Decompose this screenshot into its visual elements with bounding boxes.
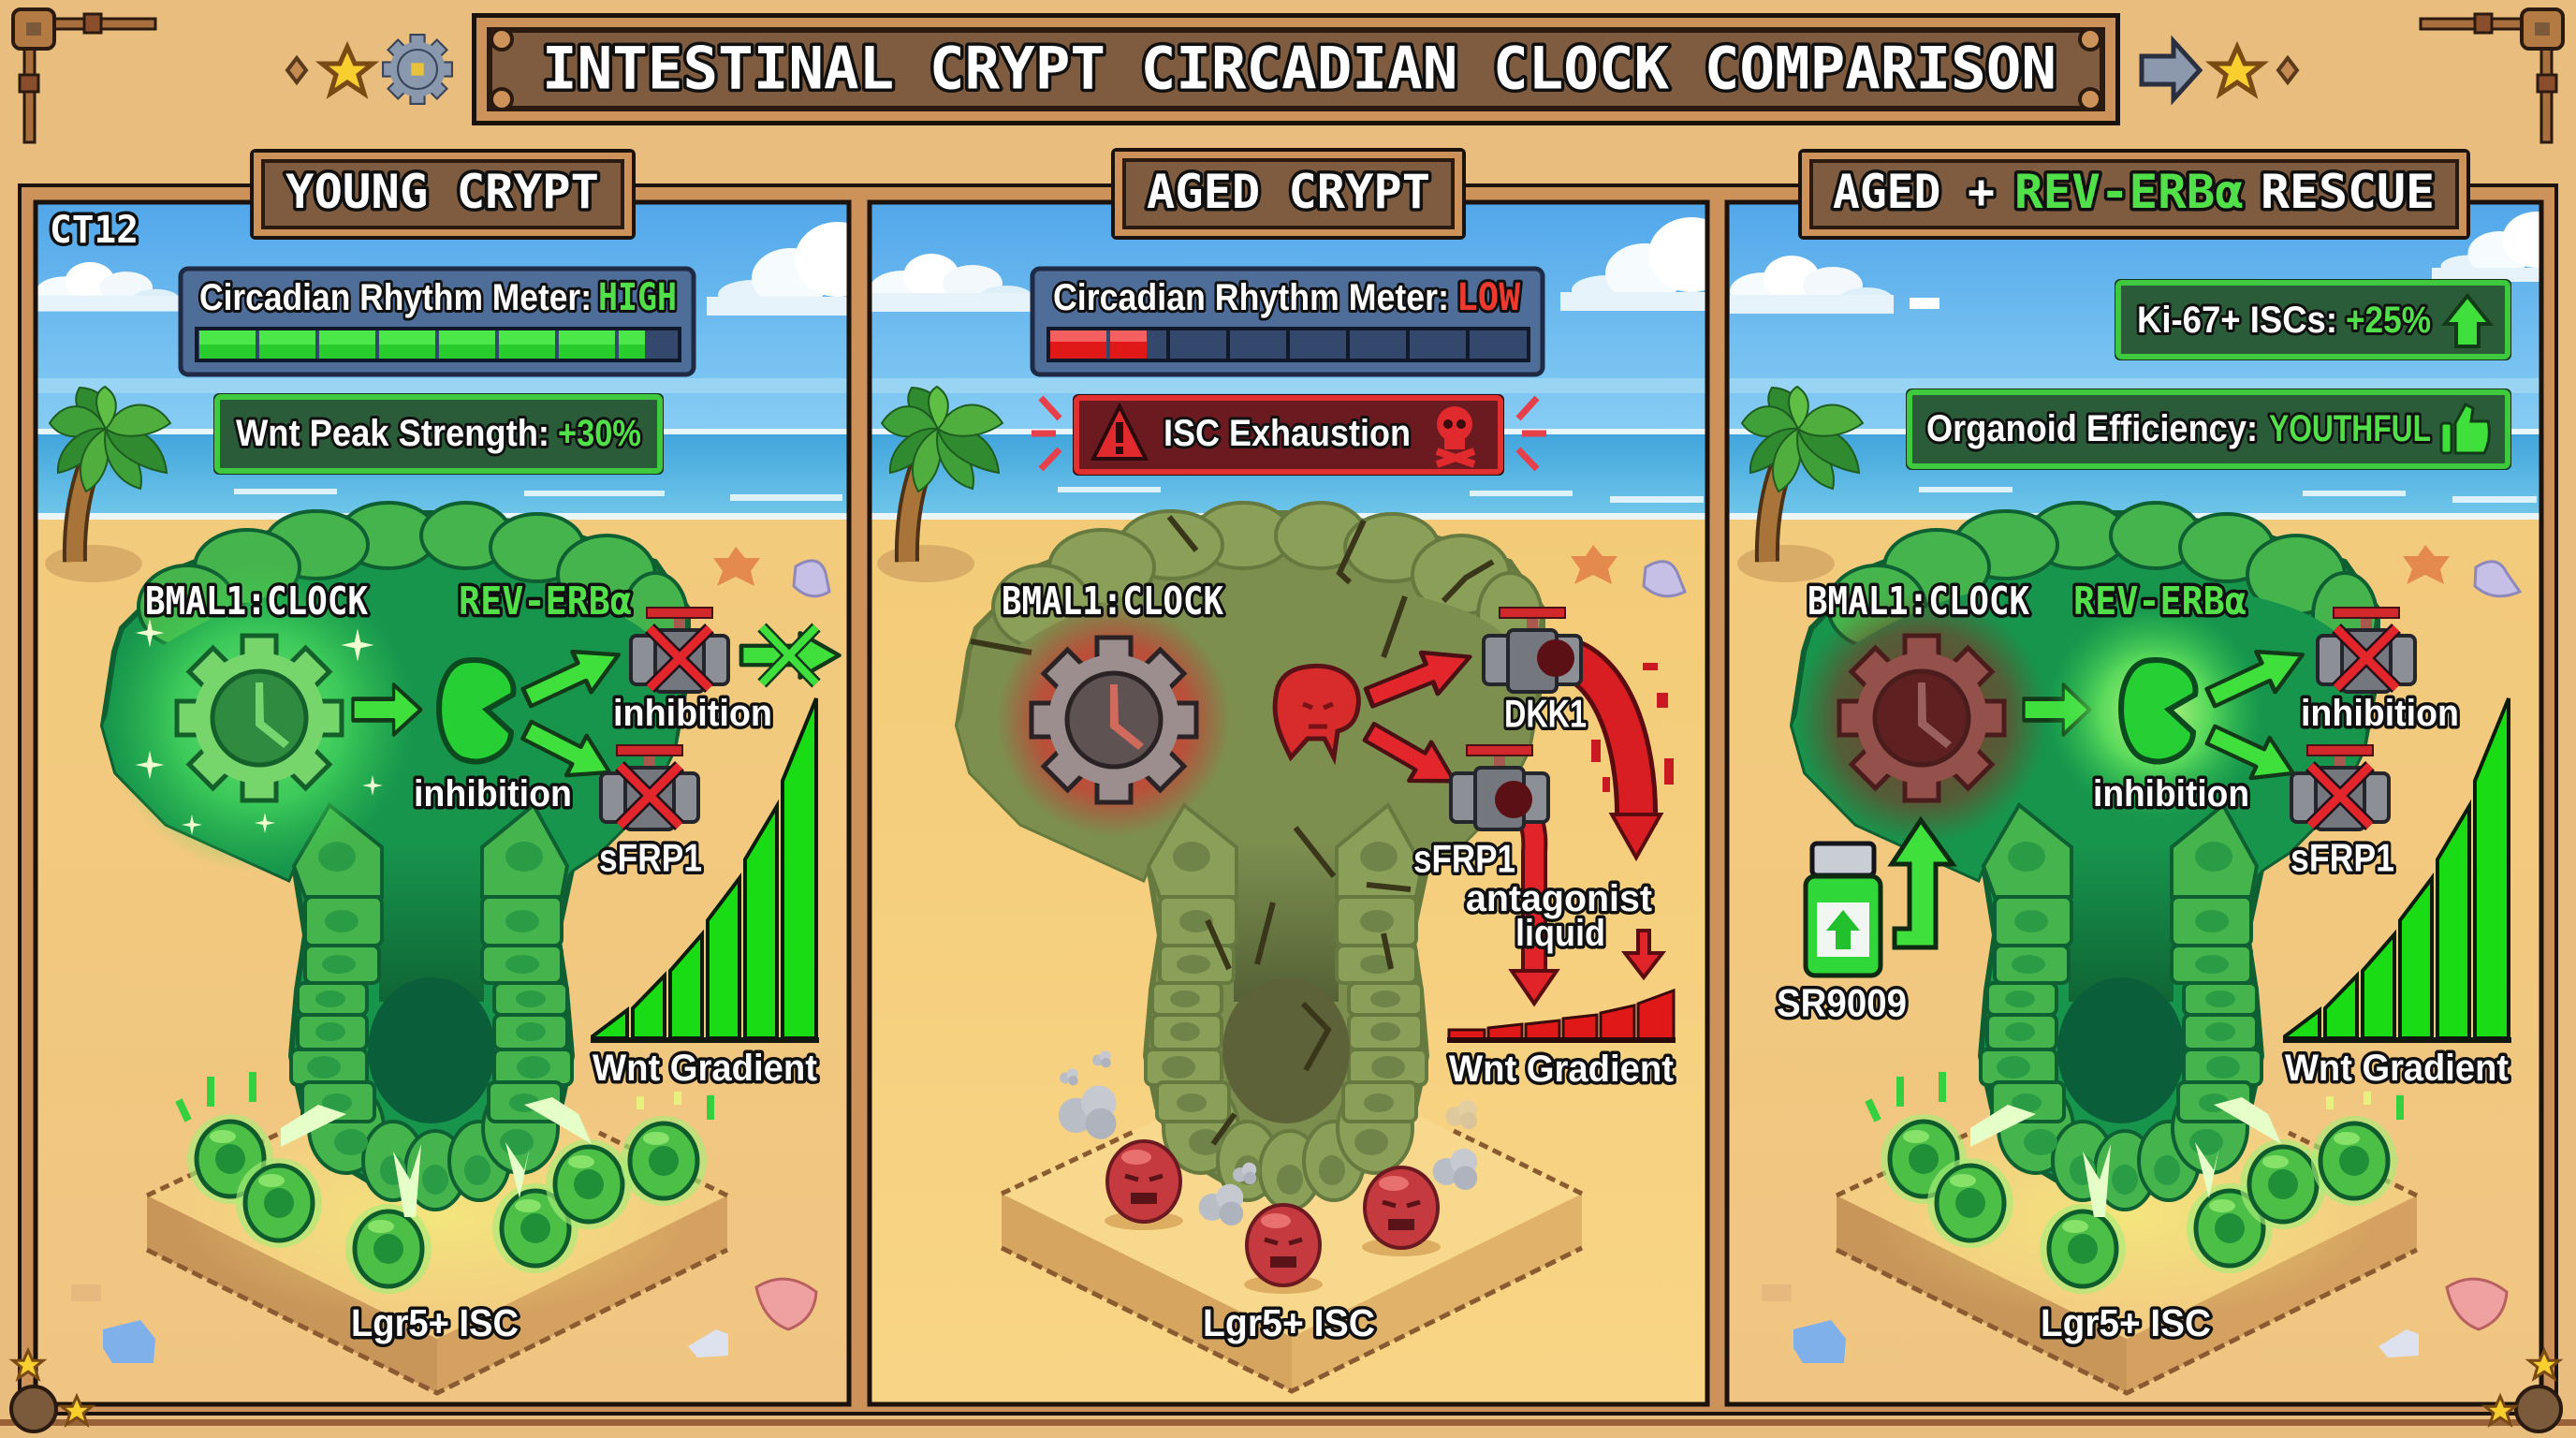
callout: organoid efficiency xyxy=(1906,389,2511,470)
REV-ERB glow xyxy=(2047,604,2262,819)
label: antagonist liquid xyxy=(1466,878,1652,954)
gear clock xyxy=(1032,638,1196,802)
crypt xyxy=(103,503,688,1210)
label: BMAL1:CLOCK: BMAL1:CLOCK xyxy=(1808,579,2029,624)
Wnt gradient chart xyxy=(591,698,819,1043)
corner ornament top-right xyxy=(2421,9,2563,142)
icon: skull and crossbones xyxy=(1437,406,1474,464)
crypt cracks xyxy=(971,517,1493,1144)
withered crypt xyxy=(958,503,1543,1210)
valve: top blocked xyxy=(631,608,728,692)
label: BMAL1:CLOCK: BMAL1:CLOCK xyxy=(1002,579,1223,624)
meter label: Circadian Rhythm Meter: xyxy=(199,277,592,318)
label: inhibition lower: inhibition xyxy=(2093,773,2249,814)
label: antagonist liquid: liquid xyxy=(1515,913,1605,954)
panel title: aged crypt xyxy=(1111,148,1466,240)
beach shells xyxy=(1571,545,1685,596)
beach shells xyxy=(71,547,829,1363)
palm tree xyxy=(45,387,170,582)
label: Lgr5+ ISC: Lgr5+ ISC xyxy=(1203,1301,1375,1344)
arrow: inhibition up xyxy=(518,635,628,718)
arrow: to DKK1 xyxy=(1361,637,1478,718)
icon: up arrow xyxy=(2445,296,2490,346)
label: Wnt Gradient: Wnt Gradient xyxy=(593,1048,817,1089)
platform xyxy=(147,1058,727,1393)
Lgr5 stem cells xyxy=(187,1114,707,1294)
energy streaks xyxy=(175,1072,714,1123)
gear clock xyxy=(177,636,342,800)
valve: sFRP1 blocked xyxy=(2291,745,2389,829)
callout label: Ki-67+ ISCs: xyxy=(2137,300,2337,341)
arrow: inhibition down xyxy=(2202,714,2303,793)
platform glow xyxy=(184,1114,690,1320)
crossed output arrow xyxy=(741,627,839,683)
platform xyxy=(1002,1056,1582,1391)
label: inhibition lower: inhibition xyxy=(414,773,572,814)
label: antagonist liquid: antagonist xyxy=(1466,878,1652,919)
arrow: inhibition up xyxy=(2202,635,2312,718)
label: REV-ERB: REV-ERBα xyxy=(2073,579,2247,624)
header icons left: diamond, star, gear xyxy=(287,35,452,104)
energy streaks xyxy=(1865,1072,2404,1123)
label: Lgr5+ ISC: Lgr5+ ISC xyxy=(2041,1301,2211,1344)
sad red REV-ERB xyxy=(1275,666,1358,757)
title text: aged plus: AGED + xyxy=(1833,165,1995,219)
callout: Wnt peak strength xyxy=(213,393,664,475)
Wnt gradient chart xyxy=(1447,990,1676,1043)
corner ornament bottom-left xyxy=(11,1350,92,1431)
clock glow xyxy=(997,603,1231,837)
Wnt gradient chart xyxy=(2283,698,2511,1043)
callout label: Organoid Efficiency: xyxy=(1926,408,2258,449)
callout value: YOUTHFUL xyxy=(2269,408,2431,449)
SR9009 bottle xyxy=(1806,844,1881,976)
callout value: +25% xyxy=(2346,300,2431,341)
meter value: LOW xyxy=(1456,276,1521,319)
Lgr5 stem cells xyxy=(1881,1114,2397,1294)
beach shells xyxy=(1762,545,2520,1363)
exhausted Lgr5 cells xyxy=(1105,1141,1441,1294)
panel title: rescue xyxy=(1798,149,2470,240)
dust clouds xyxy=(1059,1050,1477,1225)
meter label: Circadian Rhythm Meter: xyxy=(1053,277,1449,318)
title text: AGED CRYPT xyxy=(1147,165,1430,219)
arrow: to sFRP1 xyxy=(1358,712,1465,800)
arrow: clock to REV-ERB xyxy=(2024,684,2089,735)
small red arrow xyxy=(1625,931,1662,977)
clock dim glow xyxy=(1795,592,2048,844)
valve: sFRP1 blocked xyxy=(601,745,698,829)
callout value: +30% xyxy=(558,413,641,454)
title text: REV-ERB: REV-ERBα xyxy=(2014,165,2244,219)
panel: aged + REV-ERB rescue xyxy=(1727,202,2571,1404)
label: REV-ERB: REV-ERBα xyxy=(459,579,632,624)
title banner xyxy=(472,13,2120,125)
palm tree xyxy=(877,387,1003,582)
label: sFRP1: sFRP1 xyxy=(2291,835,2394,880)
corner ornament top-left xyxy=(13,9,155,142)
rhythm meter xyxy=(1032,269,1543,374)
REV-ERB blob xyxy=(2121,660,2195,762)
scene background: beach xyxy=(36,202,881,1404)
clock glow xyxy=(105,564,414,873)
meter bar xyxy=(197,329,680,360)
panel title: young crypt xyxy=(250,149,636,240)
arrow: inhibition down xyxy=(517,711,620,792)
callout label: Wnt Peak Strength: xyxy=(236,413,549,454)
header icons right: arrow, star, diamond xyxy=(2142,41,2297,99)
label: inhibition top: inhibition xyxy=(2301,693,2459,734)
antagonist liquid stream sFRP1 xyxy=(1512,801,1557,1004)
title text: rescue: RESCUE xyxy=(2261,165,2435,219)
panel: young crypt xyxy=(36,202,881,1404)
energy bursts xyxy=(281,1097,592,1217)
label: sFRP1: sFRP1 xyxy=(599,835,702,880)
REV-ERB blob xyxy=(439,660,513,762)
valve: DKK1 xyxy=(1484,608,1581,692)
scene background: beach xyxy=(870,202,1734,1404)
icon: warning triangle xyxy=(1093,406,1146,459)
label: CT12: CT12 xyxy=(50,209,139,252)
meter value: HIGH xyxy=(598,276,677,319)
crypt xyxy=(1793,503,2378,1210)
meter bar xyxy=(1048,329,1529,360)
callout text: ISC Exhaustion xyxy=(1164,413,1411,454)
label: Wnt Gradient: Wnt Gradient xyxy=(2285,1048,2509,1089)
sparkles xyxy=(136,619,383,835)
corner ornament bottom-right xyxy=(2485,1350,2561,1431)
icon: thumbs up xyxy=(2441,404,2489,453)
title text: YOUNG CRYPT xyxy=(285,165,599,219)
label: inhibition top: inhibition xyxy=(613,693,772,734)
arrow: drug to clock xyxy=(1892,820,1953,947)
scene background: beach xyxy=(1727,202,2571,1404)
valve: sFRP1 xyxy=(1451,745,1548,829)
callout: ISC exhaustion xyxy=(1073,394,1504,476)
valve: top blocked xyxy=(2318,608,2415,692)
panel: aged crypt xyxy=(870,202,1734,1404)
rhythm meter xyxy=(181,269,694,374)
platform glow xyxy=(1874,1114,2379,1320)
alarm rays xyxy=(1032,398,1546,469)
label: Lgr5+ ISC: Lgr5+ ISC xyxy=(351,1301,519,1344)
callout: Ki-67 xyxy=(2115,279,2511,360)
label: Wnt Gradient: Wnt Gradient xyxy=(1449,1049,1674,1090)
platform xyxy=(1837,1058,2417,1393)
label: sFRP1: sFRP1 xyxy=(1413,837,1515,880)
label: SR9009: SR9009 xyxy=(1777,981,1907,1024)
label: DKK1: DKK1 xyxy=(1504,691,1587,736)
antagonist liquid stream DKK1 xyxy=(1554,655,1674,858)
arrow: clock to REV-ERB xyxy=(353,684,421,735)
title text: INTESTINAL CRYPT CIRCADIAN CLOCK COMPARISON xyxy=(542,34,2056,103)
palm tree xyxy=(1737,387,1863,582)
gear clock reddish xyxy=(1839,636,2004,800)
energy bursts xyxy=(1970,1097,2281,1217)
label: BMAL1:CLOCK: BMAL1:CLOCK xyxy=(145,579,368,624)
